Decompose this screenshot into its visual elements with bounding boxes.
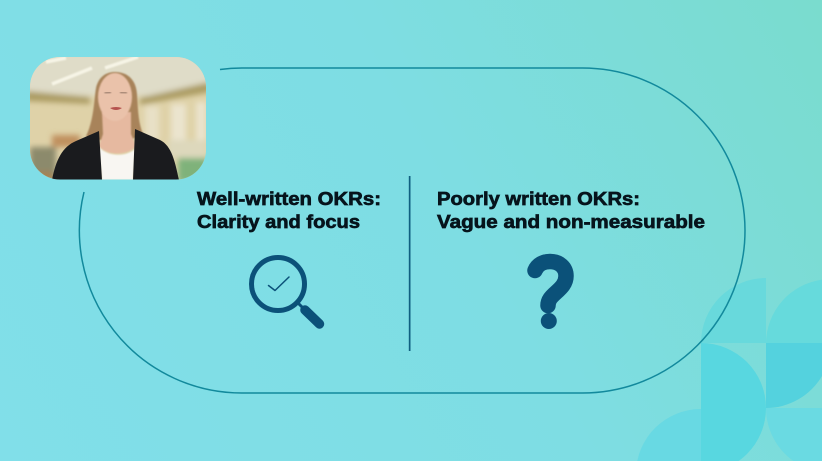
icon: question mark (535, 262, 566, 329)
blazer (52, 131, 102, 180)
decorative geometric shapes (636, 278, 822, 461)
heading: poorly written OKRs (437, 189, 705, 232)
presenter photo (26, 53, 210, 182)
heading: poorly written OKRs: Poorly written OKRs: (437, 189, 640, 209)
heading: well-written OKRs: Well-written OKRs: (197, 189, 381, 209)
heading: well-written OKRs: Clarity and focus (197, 212, 360, 232)
heading: well-written OKRs (197, 189, 381, 232)
white top (99, 147, 135, 180)
rounded outline frame (79, 68, 745, 393)
icon: magnifying glass with check (252, 258, 320, 324)
divider (409, 176, 410, 351)
hair (86, 72, 143, 140)
heading: poorly written OKRs: Vague and non-measurable (437, 212, 705, 232)
neck (99, 112, 136, 154)
face (98, 73, 132, 121)
